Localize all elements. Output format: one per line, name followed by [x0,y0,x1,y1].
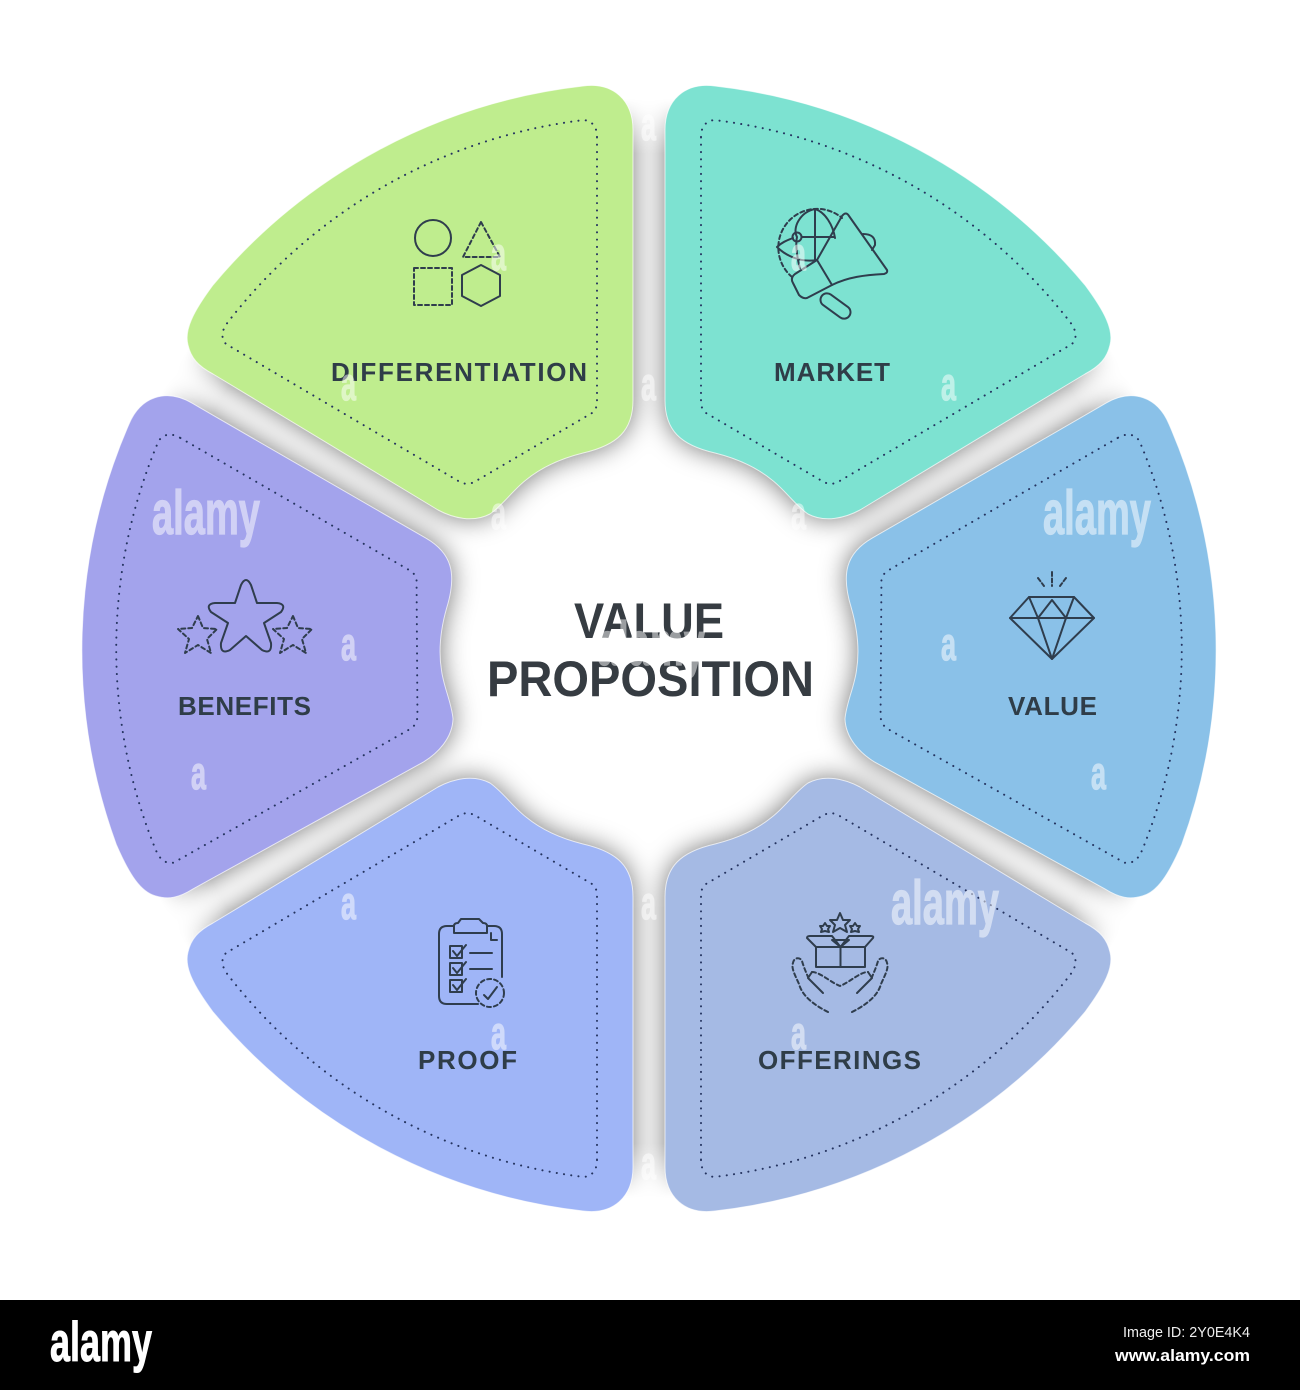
market shape [665,85,1111,519]
watermarks: alamy [1043,479,1151,548]
watermarks: alamy [597,610,705,679]
panel: benefits [0,381,529,984]
watermarks: a [791,228,806,280]
panel: differentiation [187,85,633,519]
label: offerings: OFFERINGS [758,1045,921,1075]
value dotted outline [818,429,1300,936]
watermarks: a [341,618,356,670]
watermarks: a [641,98,656,150]
watermarks: alamy [891,869,999,938]
website: www.alamy.com [1114,1346,1250,1365]
watermarks: a [641,358,656,410]
watermarks: a [641,1137,656,1189]
label: market: MARKET [774,357,890,387]
label: differentiation: DIFFERENTIATION [331,357,587,387]
image id: Image ID: 2Y0E4K4 [1123,1324,1250,1341]
title: PROPOSITION [487,651,814,707]
footer bar [0,1300,1300,1390]
panel: market [665,85,1111,519]
icon: three stars [178,580,312,653]
watermarks: a [941,358,956,410]
watermarks: a [491,1007,506,1059]
offerings shape [665,778,1111,1212]
watermarks: a [791,1007,806,1059]
panel: value [769,381,1300,984]
icon: gift box in hands [792,913,888,1012]
label: value: VALUE [1008,691,1097,721]
shape shadows [168,107,1130,1190]
offerings dotted outline [701,813,1076,1177]
benefits dotted outline [0,429,480,936]
differentiation dotted outline [222,120,597,484]
panel: proof [187,778,633,1212]
watermarks: a [191,747,206,799]
title: VALUE [574,593,724,649]
watermarks [152,98,1151,1189]
watermarks: a [641,877,656,929]
watermarks: a [491,228,506,280]
label: benefits: BENEFITS [178,691,311,721]
icon: geometric shapes [414,220,500,306]
watermarks: a [941,618,956,670]
icon: globe and megaphone [777,209,887,321]
proof dotted outline [222,813,597,1177]
watermarks: a [1091,747,1106,799]
footer logo: alamy [50,1310,152,1373]
title [487,593,814,707]
watermarks: alamy [152,479,260,548]
watermarks: a [341,877,356,929]
proof shape [187,778,633,1212]
icon: diamond [1010,572,1094,659]
benefits shape [0,381,529,984]
differentiation shape [187,85,633,519]
market dotted outline [701,120,1076,484]
watermarks: a [791,487,806,539]
watermarks: a [491,487,506,539]
panel: offerings [665,778,1111,1212]
watermarks: a [341,358,356,410]
label: proof: PROOF [418,1045,517,1075]
value shape [769,381,1300,984]
icon: clipboard checklist [439,919,504,1007]
